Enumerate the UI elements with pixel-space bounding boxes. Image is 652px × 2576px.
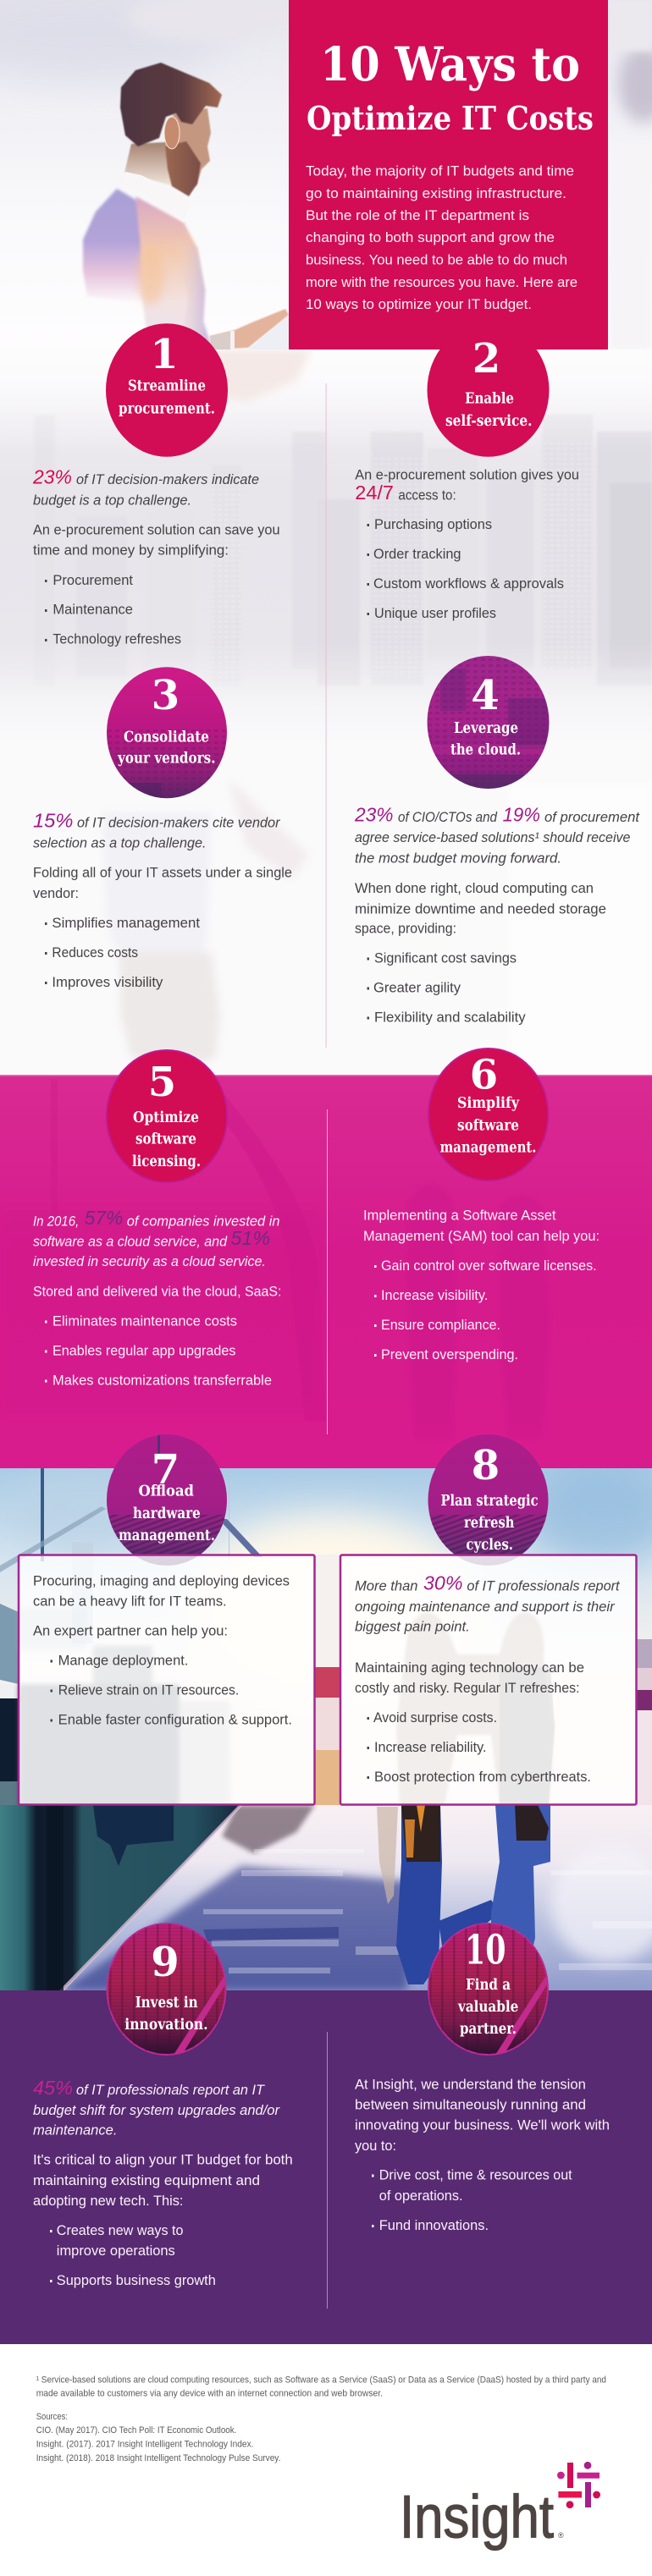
magenta section background	[0, 1075, 652, 1468]
badge 6: management.	[440, 1140, 537, 1157]
text: step 4: minimize downtime and needed storage	[355, 901, 606, 916]
Insight logo: ®	[558, 2531, 564, 2540]
footnote	[36, 2375, 606, 2399]
text: step 4: 23%	[354, 804, 393, 826]
intro paragraph: But the role of the IT department is	[306, 208, 529, 223]
text: step 3: selection as a top challenge.	[33, 836, 207, 851]
neck	[124, 142, 174, 186]
text: step 9: Supports business growth	[57, 2273, 216, 2288]
text: step 5: 51%	[230, 1227, 270, 1249]
badge 9: Invest in	[135, 1995, 198, 2012]
badge 8	[428, 1434, 549, 1567]
badge 5: Optimize	[133, 1109, 199, 1126]
badge 9: 9	[151, 1939, 180, 1986]
badge 1: procurement.	[119, 400, 215, 417]
badge 7	[107, 1434, 227, 1567]
text: step 5: Stored and delivered via the cloud, SaaS:	[33, 1285, 281, 1300]
badge 3: your vendors.	[117, 751, 215, 768]
text: step 3: Improves visibility	[52, 975, 163, 990]
badge 5: software	[135, 1131, 196, 1148]
badge 7: 7	[152, 1446, 180, 1494]
sources: CIO. (May 2017). CIO Tech Poll: IT Economic Outlook.	[36, 2425, 236, 2436]
column divider	[326, 383, 327, 1048]
badge 8: Plan strategic	[440, 1493, 539, 1510]
panel: step 8: ongoing maintenance and support is their	[355, 1599, 616, 1615]
text: step 4: Greater agility	[373, 981, 461, 996]
text: step 6: Implementing a Software Asset	[363, 1208, 556, 1224]
text: step 3	[33, 809, 292, 990]
badge 8: refresh	[464, 1515, 515, 1532]
text: step 2: Unique user profiles	[374, 606, 496, 621]
text: step 2: Purchasing options	[374, 517, 492, 532]
text: step 5: invested in security as a cloud service.	[33, 1254, 266, 1269]
text: step 4: Flexibility and scalability	[374, 1010, 526, 1026]
text: step 4: agree service-based solutions¹ should receive	[355, 830, 630, 845]
text: step 1: An e-procurement solution can save you	[33, 523, 279, 538]
panel: step 8	[340, 1555, 637, 1804]
badge 6	[428, 1049, 548, 1181]
tablet	[248, 316, 289, 350]
gap between panels	[315, 1555, 340, 1667]
badge 5: licensing.	[132, 1153, 201, 1170]
badge 8: 8	[472, 1442, 500, 1489]
text: step 10: At Insight, we understand the tension	[355, 2077, 586, 2092]
text: step 4: 19%	[503, 804, 540, 826]
text: step 4	[354, 804, 640, 1026]
panel: step 7: Enable faster configuration & support.	[58, 1713, 292, 1728]
title line 1: 10 Ways to	[320, 36, 580, 91]
text: step 9: of IT professionals report an IT	[76, 2083, 265, 2098]
text: step 9: maintaining existing equipment and	[33, 2173, 260, 2188]
text: step 9: budget shift for system upgrades and/or	[33, 2103, 281, 2118]
Insight logo: Insight	[400, 2484, 554, 2551]
text: step 6: Ensure compliance.	[381, 1318, 500, 1333]
panel: step 7: An expert partner can help you:	[33, 1624, 228, 1639]
text: step 1: budget is a top challenge.	[33, 493, 191, 509]
walkway floor	[64, 1805, 652, 1990]
text: step 9: 45%	[33, 2077, 73, 2099]
text: step 5: Makes customizations transferrable	[52, 1373, 272, 1389]
text: step 9: adopting new tech. This:	[33, 2193, 183, 2209]
panel: step 8: of IT professionals report	[467, 1578, 621, 1593]
intro paragraph	[306, 163, 577, 312]
right edge strip	[637, 1639, 652, 1668]
skyline behind panel 7	[15, 1645, 227, 1805]
beard	[165, 141, 201, 196]
text: step 3: Reduces costs	[52, 945, 138, 960]
badge 7: management.	[119, 1527, 215, 1544]
text: step 4: Significant cost savings	[374, 951, 517, 966]
badge 3: 3	[152, 672, 180, 719]
footnote: made available to customers via any device with an internet connection and web browser.	[36, 2389, 383, 2399]
badge 3: Consolidate	[124, 729, 209, 746]
text: step 5: Eliminates maintenance costs	[52, 1314, 237, 1329]
badge 6: software	[457, 1118, 519, 1135]
panel: step 8: Boost protection from cyberthreats.	[374, 1770, 591, 1785]
title line 2: Optimize IT Costs	[307, 99, 594, 137]
sources: Insight. (2018). 2018 Insight Intelligent Technology Pulse Survey.	[36, 2453, 280, 2463]
badge 10	[428, 1924, 549, 2055]
panel: step 8: Maintaining aging technology can be	[355, 1660, 584, 1676]
badge 6: Simplify	[457, 1095, 520, 1112]
purple section divider	[327, 2032, 328, 2309]
text: step 5: 57%	[85, 1207, 123, 1229]
panel: step 7: Relieve strain on IT resources.	[58, 1683, 239, 1698]
text: step 5: In 2016,	[33, 1214, 79, 1229]
panel: step 7: can be a heavy lift for IT teams.	[33, 1594, 227, 1610]
badge 4: 4	[471, 672, 500, 719]
text: step 4: of procurement	[544, 810, 640, 825]
badge 10: 10	[465, 1927, 506, 1974]
text: step 4: When done right, cloud computing can	[355, 881, 594, 896]
text: step 1: Technology refreshes	[52, 632, 181, 647]
badge 10: partner.	[460, 2021, 517, 2038]
text: step 4: of CIO/CTOs and	[398, 810, 498, 825]
badge 4: the cloud.	[450, 742, 521, 759]
text: step 2: Custom workflows & approvals	[373, 576, 564, 592]
badge 9: innovation.	[124, 2017, 208, 2034]
text: step 4: the most budget moving forward.	[355, 850, 561, 866]
text: step 1	[32, 466, 280, 647]
text: step 6: Prevent overspending.	[381, 1347, 518, 1362]
purple section background	[0, 1990, 652, 2344]
text: step 1: Procurement	[52, 573, 133, 588]
intro paragraph: business. You need to be able to do much	[306, 253, 567, 268]
badge 2: Enable	[465, 391, 514, 408]
shirt back	[81, 188, 142, 300]
text: step 2: An e-procurement solution gives you	[355, 468, 579, 483]
panel: step 7: Manage deployment.	[58, 1654, 188, 1669]
text: step 6: Management (SAM) tool can help you:	[363, 1229, 600, 1244]
magenta section divider	[327, 1109, 328, 1434]
text: step 10: Drive cost, time & resources out	[379, 2168, 572, 2183]
badge 10: valuable	[457, 1999, 518, 2016]
text: step 1: of IT decision-makers indicate	[76, 472, 259, 487]
badge 1: Streamline	[128, 378, 206, 395]
face	[165, 108, 211, 186]
text: step 4: space, providing:	[355, 922, 456, 937]
text: step 10	[355, 2077, 610, 2233]
text: step 6: Gain control over software licenses.	[381, 1258, 597, 1274]
forearm and hand	[210, 309, 289, 350]
text: step 1: Maintenance	[52, 603, 133, 618]
photo section: handshake on walkway	[0, 1464, 652, 1991]
badge 1: 1	[150, 331, 179, 378]
badge 9	[107, 1924, 227, 2055]
ear	[164, 117, 180, 149]
intro paragraph: 10 ways to optimize your IT budget.	[306, 297, 532, 312]
text: step 2: 24/7	[355, 482, 394, 504]
text: step 10: between simultaneously running and	[355, 2098, 586, 2113]
text: step 9: improve operations	[57, 2243, 175, 2259]
text: step 3: Folding all of your IT assets under a single	[33, 866, 292, 881]
text: step 3: 15%	[33, 809, 73, 831]
panel: step 8: Increase reliability.	[374, 1740, 486, 1755]
badge 4	[427, 656, 550, 791]
intro paragraph: go to maintaining existing infrastructure.	[306, 186, 566, 201]
red title panel	[289, 0, 608, 350]
collar	[125, 172, 184, 223]
panel: step 8: biggest pain point.	[355, 1620, 470, 1635]
sources: Insight. (2017). 2017 Insight Intelligent Technology Index.	[36, 2440, 253, 2450]
cityscape background	[0, 350, 652, 1075]
text: step 2: access to:	[398, 488, 456, 504]
badge 4: Leverage	[454, 720, 518, 737]
text: step 10: you to:	[355, 2138, 396, 2154]
badge 3	[107, 667, 227, 800]
text: step 10: innovating your business. We'll work with	[355, 2118, 610, 2133]
text: step 1: 23%	[32, 466, 72, 488]
handshake silhouettes	[396, 1612, 555, 1805]
text: step 5	[33, 1207, 281, 1389]
text: step 9	[33, 2077, 293, 2288]
intro paragraph: more with the resources you have. Here are	[306, 275, 577, 290]
panel: step 8: costly and risky. Regular IT refreshes:	[355, 1681, 579, 1696]
badge 7: hardware	[133, 1505, 201, 1522]
text: step 10: of operations.	[379, 2188, 462, 2204]
intro paragraph: changing to both support and grow the	[306, 230, 555, 245]
badge 2: 2	[472, 335, 500, 383]
hair	[120, 63, 222, 146]
text: step 6: Increase visibility.	[381, 1288, 488, 1303]
badge 1	[106, 323, 228, 457]
text: step 9: It's critical to align your IT budget for both	[33, 2153, 293, 2168]
text: step 5: Enables regular app upgrades	[52, 1344, 235, 1359]
text: step 9: Creates new ways to	[57, 2223, 183, 2238]
panel: step 8: More than	[355, 1578, 418, 1593]
badge 2	[427, 323, 549, 457]
badge 6: 6	[470, 1052, 498, 1099]
text: step 2: Order tracking	[373, 547, 461, 562]
badge 2: self-service.	[445, 413, 532, 430]
panel: step 7: Procuring, imaging and deploying devices	[33, 1573, 290, 1588]
sources	[36, 2412, 280, 2463]
text: step 1: time and money by simplifying:	[33, 543, 229, 559]
badge 5: 5	[148, 1059, 176, 1106]
Insight logo	[400, 2462, 600, 2551]
sources: Sources:	[36, 2412, 68, 2422]
text: step 2	[355, 468, 579, 621]
text: step 5: of companies invested in	[127, 1214, 279, 1229]
text: step 6	[363, 1208, 600, 1362]
text: step 3: of IT decision-makers cite vendor	[77, 816, 281, 831]
footnote: ¹ Service-based solutions are cloud computing resources, such as Software as a Service (SaaS) or Data as a Service (DaaS) hosted by a third party and	[36, 2375, 606, 2386]
panel: step 8: Avoid surprise costs.	[373, 1710, 497, 1726]
panel: step 8: 30%	[423, 1572, 462, 1594]
hero photo: man with tablet	[0, 0, 652, 350]
text: step 10: Fund innovations.	[379, 2218, 489, 2233]
text: step 5: software as a cloud service, and	[33, 1234, 228, 1249]
text: step 9: maintenance.	[33, 2123, 117, 2138]
text: step 3: vendor:	[33, 886, 79, 901]
badge 5	[107, 1050, 227, 1182]
badge 7: Offload	[139, 1483, 194, 1500]
badge 10: Find a	[466, 1977, 511, 1994]
intro paragraph: Today, the majority of IT budgets and time	[306, 163, 574, 179]
text: step 3: Simplifies management	[52, 916, 200, 931]
badge 8: cycles.	[466, 1537, 513, 1554]
panel: step 7	[19, 1555, 315, 1804]
